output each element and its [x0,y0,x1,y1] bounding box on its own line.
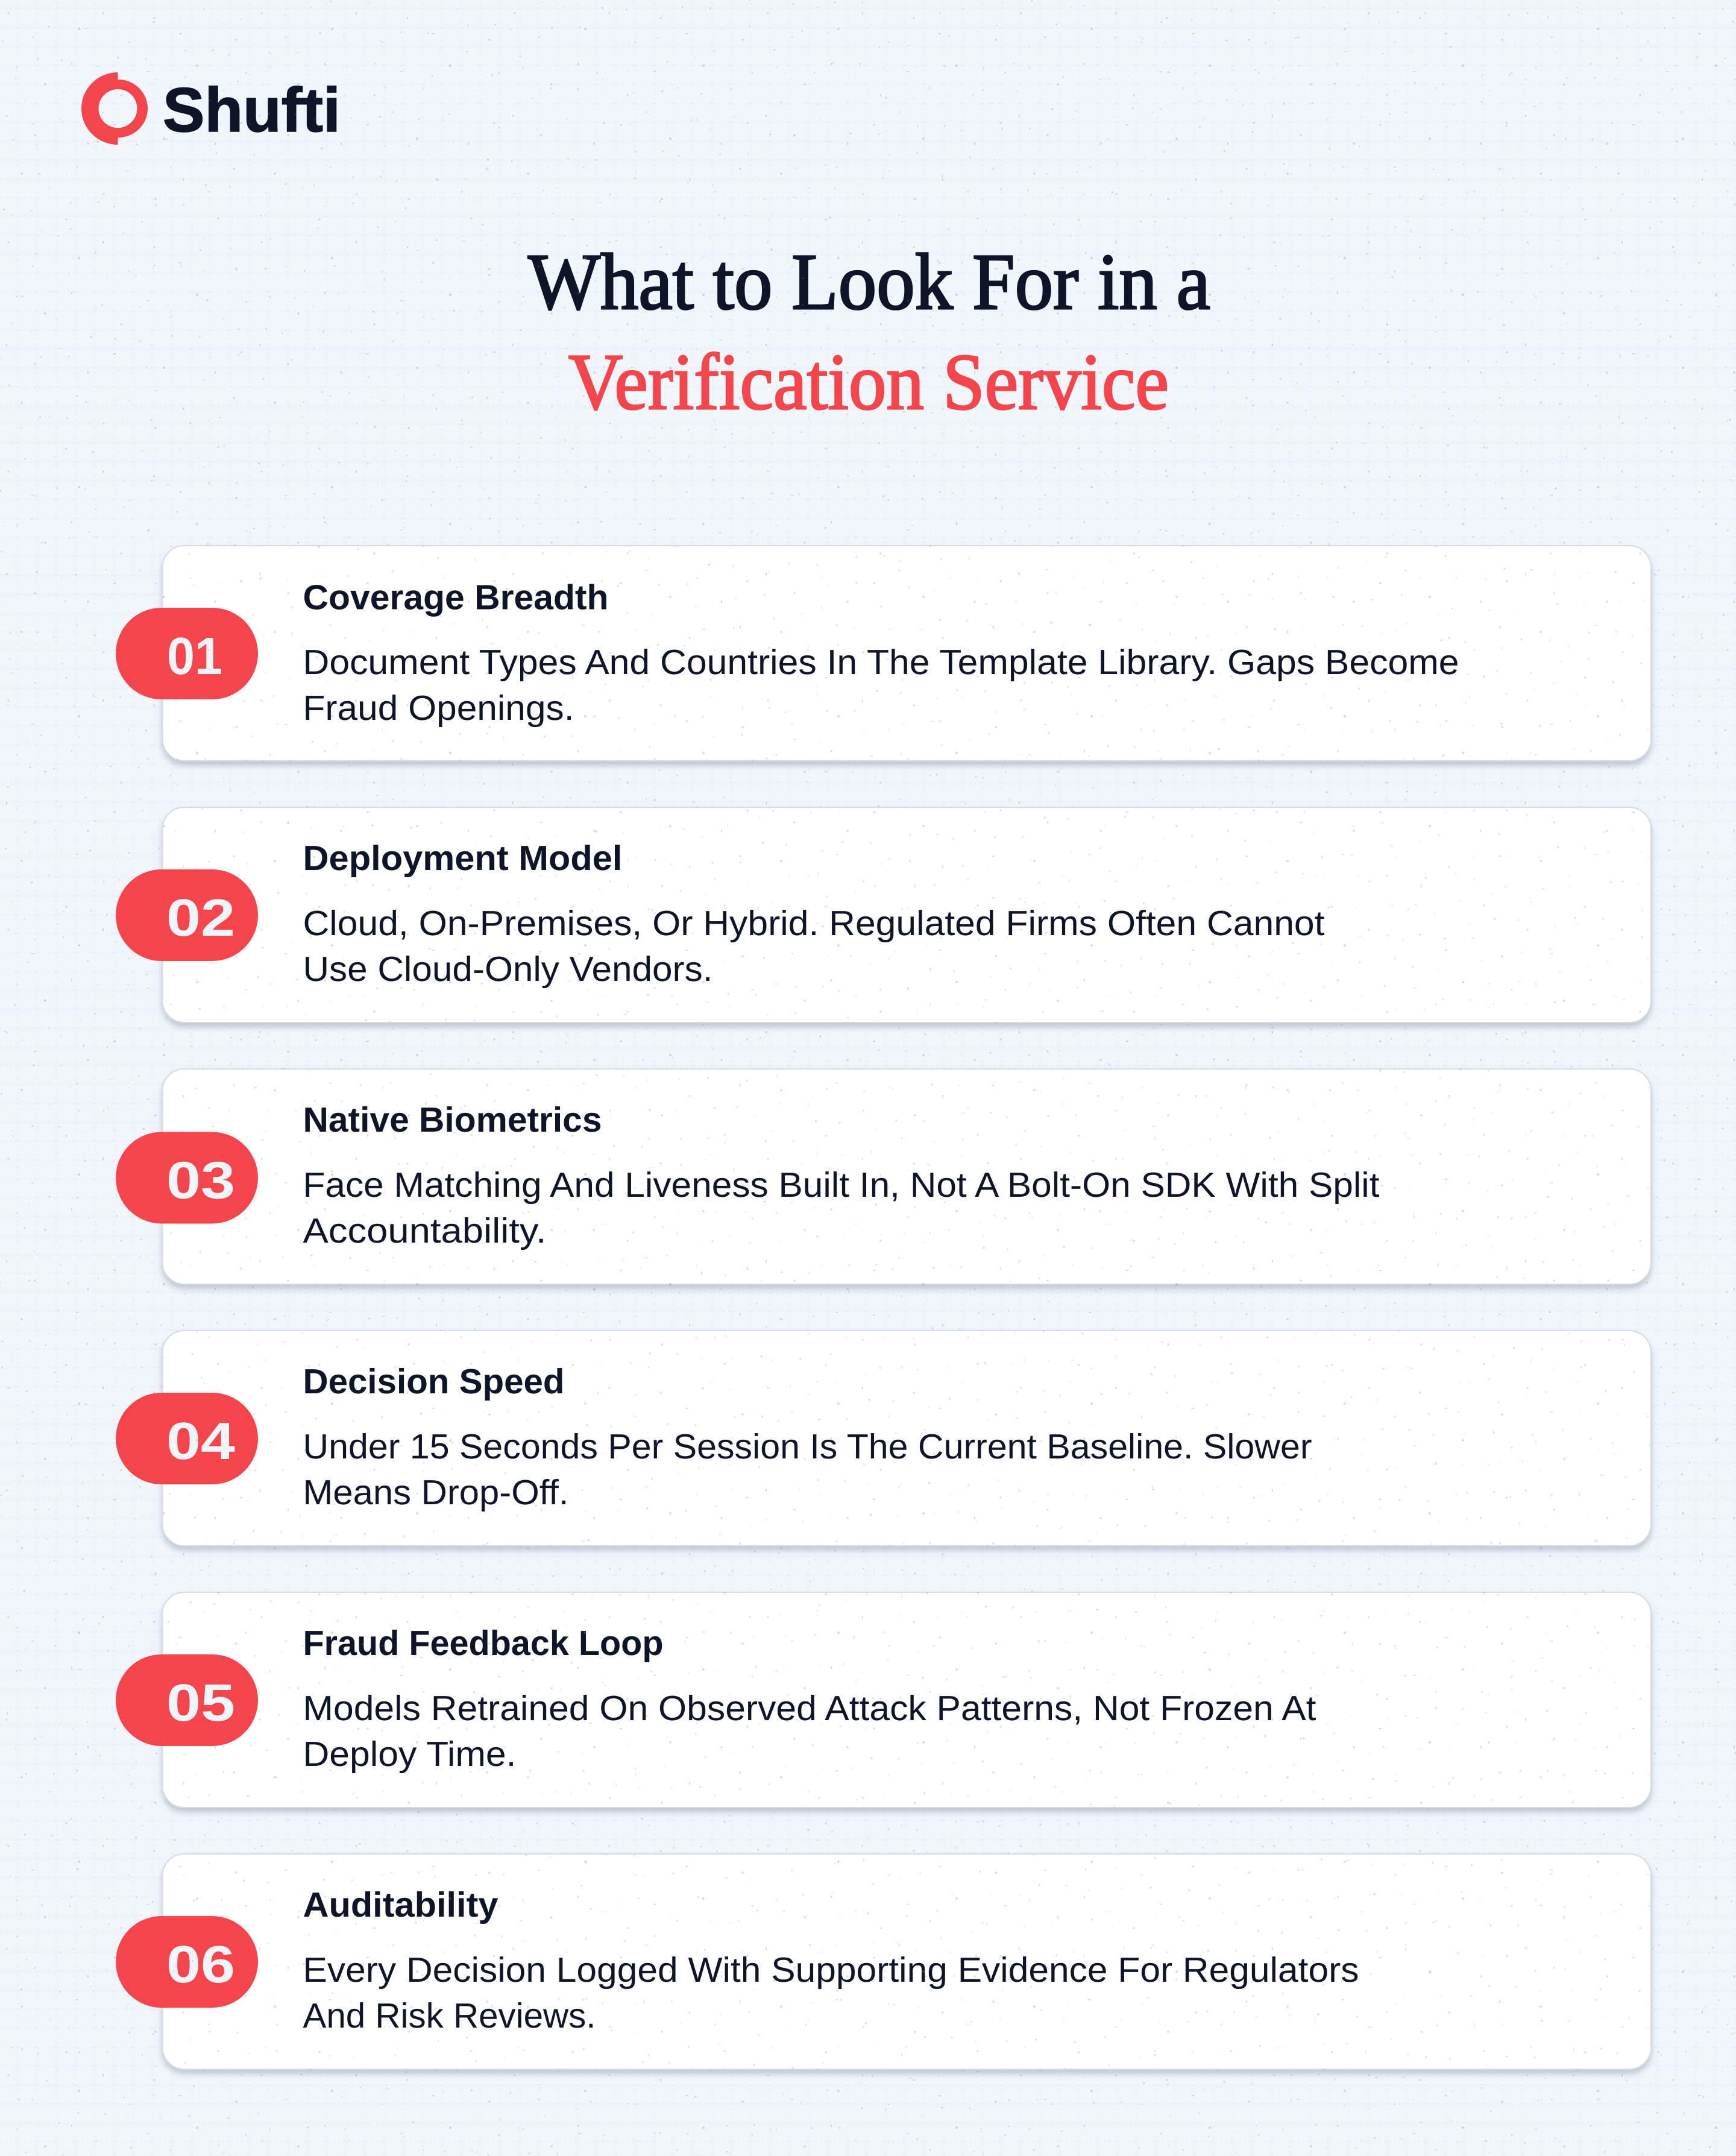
logo: Shufti [81,72,341,145]
number badge 04 [116,1393,258,1484]
heading: Coverage Breadth [303,578,609,617]
logo wordmark: Shufti [163,75,341,145]
description [303,904,1325,989]
number badge 01: 01 [167,627,222,686]
description: And Risk Reviews. [303,1996,596,2035]
description: Deploy Time. [303,1735,516,1774]
number badge 05 [116,1654,258,1746]
description [303,1950,1359,2035]
number badge 02: 02 [166,889,235,947]
card background [163,1069,1651,1284]
number badge 03 [116,1132,258,1224]
description: Means Drop-Off. [303,1473,569,1512]
description [303,1689,1316,1774]
number badge 01 [116,608,258,699]
description: Fraud Openings. [303,689,574,728]
panel: 04 Decision Speed [116,1331,1651,1546]
title [528,237,1210,426]
description [303,1165,1379,1250]
description [303,643,1459,728]
card background [163,1592,1651,1808]
description: Document Types And Countries In The Template Library. Gaps Become [303,643,1459,682]
card background [163,807,1651,1023]
heading: Decision Speed [303,1362,564,1401]
number badge 04: 04 [166,1412,235,1470]
number badge 06: 06 [166,1935,235,1994]
heading: Native Biometrics [303,1100,602,1139]
description [303,1427,1312,1512]
number badge 05: 05 [166,1674,235,1732]
panel: 05 Fraud Feedback Loop [116,1592,1651,1808]
description: Cloud, On-Premises, Or Hybrid. Regulated Firms Often Cannot [303,904,1325,943]
card background [163,1331,1651,1546]
number badge 06 [116,1916,258,2008]
panel: 01 Coverage Breadth [116,546,1651,761]
heading: Auditability [303,1885,498,1924]
number badge 02 [116,869,258,961]
panel: 02 Deployment Model [116,807,1651,1023]
description: Accountability. [303,1211,546,1250]
heading: Deployment Model [303,839,622,878]
heading: Fraud Feedback Loop [303,1624,663,1663]
description: Under 15 Seconds Per Session Is The Current Baseline. Slower [303,1427,1312,1466]
card background [163,546,1651,761]
description: Use Cloud-Only Vendors. [303,950,712,989]
description: Models Retrained On Observed Attack Patterns, Not Frozen At [303,1689,1316,1728]
panel: 06 Auditability [116,1854,1651,2069]
description: Face Matching And Liveness Built In, Not A Bolt-On SDK With Split [303,1165,1379,1205]
panel: 03 Native Biometrics [116,1069,1651,1284]
title line 2: Verification Service [568,337,1169,426]
icon: logo ring [81,72,148,145]
number badge 03: 03 [166,1152,235,1209]
title line 1: What to Look For in a [528,237,1210,326]
description: Every Decision Logged With Supporting Evidence For Regulators [303,1950,1359,1990]
card background [163,1854,1651,2069]
